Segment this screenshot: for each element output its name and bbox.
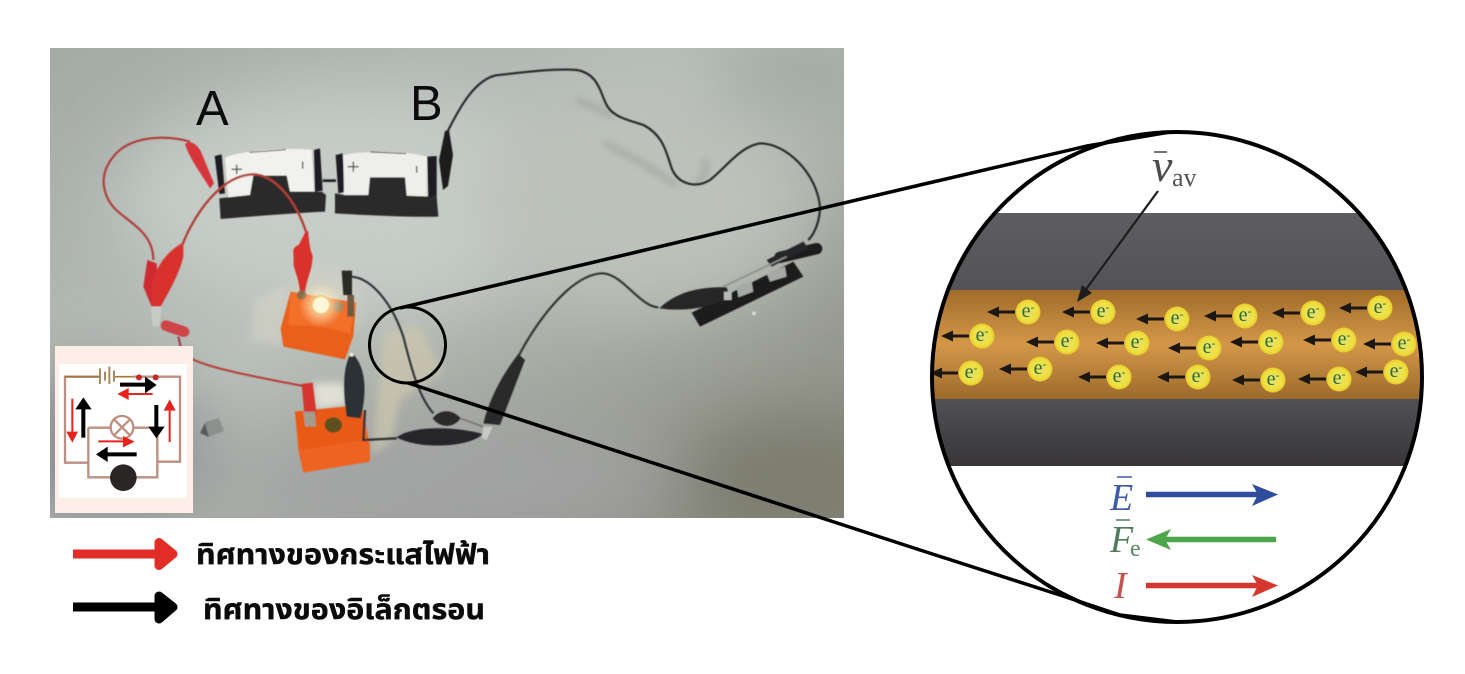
electrons: - <box>1030 300 1034 314</box>
drift velocity label and arrow <box>1077 140 1197 302</box>
electrons: e <box>1390 360 1398 382</box>
circuit objects <box>104 70 820 473</box>
electrons: - <box>973 361 977 375</box>
black wires and switch <box>448 70 820 357</box>
copper conductor <box>925 290 1430 399</box>
battery holders A and B <box>215 148 438 219</box>
vector E and arrow: E <box>1109 477 1133 519</box>
electrons: - <box>1341 367 1345 381</box>
wire insulation <box>925 213 1430 466</box>
electrons: e <box>1192 365 1200 387</box>
electrons: - <box>1398 360 1402 374</box>
electrons: - <box>1275 368 1279 382</box>
bulb holder, switch base and clips <box>190 244 525 473</box>
electrons: - <box>1121 365 1125 379</box>
electrons: e <box>1113 365 1121 387</box>
text: current direction: ทิศทางของกระแสไฟฟ้า <box>196 539 490 570</box>
spare bulb <box>200 418 224 437</box>
electrons: - <box>1105 300 1109 314</box>
light bulb <box>300 287 342 326</box>
zoom line bottom <box>408 383 1177 622</box>
legend: electron direction <box>73 594 485 625</box>
electrons: e <box>1307 301 1315 323</box>
current I and arrow <box>1114 573 1278 598</box>
drift velocity label and arrow: v <box>1152 140 1173 191</box>
electrons: - <box>1273 330 1277 344</box>
electrons: - <box>1139 331 1143 345</box>
electrons: - <box>984 324 988 338</box>
legend: current direction <box>73 539 490 570</box>
lens outline <box>932 132 1422 622</box>
inset circuit diagram <box>55 346 193 513</box>
electrons: - <box>1382 296 1386 310</box>
photo background <box>50 48 844 518</box>
electrons: e <box>1338 328 1346 350</box>
electrons <box>930 296 1416 392</box>
electrons: - <box>1247 304 1251 318</box>
electrons: - <box>1042 357 1046 371</box>
electrons: - <box>1069 330 1073 344</box>
current I and arrow: I <box>1113 565 1129 607</box>
electrons: - <box>1406 332 1410 346</box>
magnifier small circle <box>370 307 446 383</box>
panel: magnified wire <box>925 132 1430 622</box>
electrons: - <box>1200 365 1204 379</box>
electrons: e <box>1097 300 1105 322</box>
text: electron direction: ทิศทางของอิเล็กตรอน <box>203 594 485 625</box>
label A: A <box>196 82 229 136</box>
vector Fe and arrow: F <box>1109 519 1134 561</box>
electrons: e <box>1061 330 1069 352</box>
arrow: red current <box>73 542 173 566</box>
electrons: e <box>1203 336 1211 358</box>
wire shadows <box>576 100 706 185</box>
electrons: e <box>1171 307 1179 329</box>
electrons: - <box>1346 328 1350 342</box>
electrons: - <box>1179 307 1183 321</box>
drift velocity label and arrow: av <box>1172 163 1197 192</box>
label B: B <box>410 77 443 131</box>
electrons: e <box>1265 330 1273 352</box>
electrons: e <box>1034 357 1042 379</box>
electrons: - <box>1211 336 1215 350</box>
vector Fe and arrow <box>1110 519 1276 556</box>
electrons: e <box>1333 367 1341 389</box>
electrons: e <box>1022 300 1030 322</box>
electrons: e <box>976 324 984 346</box>
electrons: - <box>1315 301 1319 315</box>
electrons: e <box>965 361 973 383</box>
zoom line top <box>400 132 1170 308</box>
electrons: e <box>1239 304 1247 326</box>
red wires <box>104 138 312 347</box>
black clip B <box>439 130 453 190</box>
electrons: e <box>1267 368 1275 390</box>
electrons: e <box>1131 331 1139 353</box>
vector Fe and arrow: e <box>1130 536 1141 562</box>
electrons: e <box>1374 296 1382 318</box>
vector E and arrow <box>1110 476 1278 510</box>
panel: photo of circuit <box>0 30 900 540</box>
arrow: black electron <box>73 596 173 619</box>
electrons: e <box>1398 332 1406 354</box>
